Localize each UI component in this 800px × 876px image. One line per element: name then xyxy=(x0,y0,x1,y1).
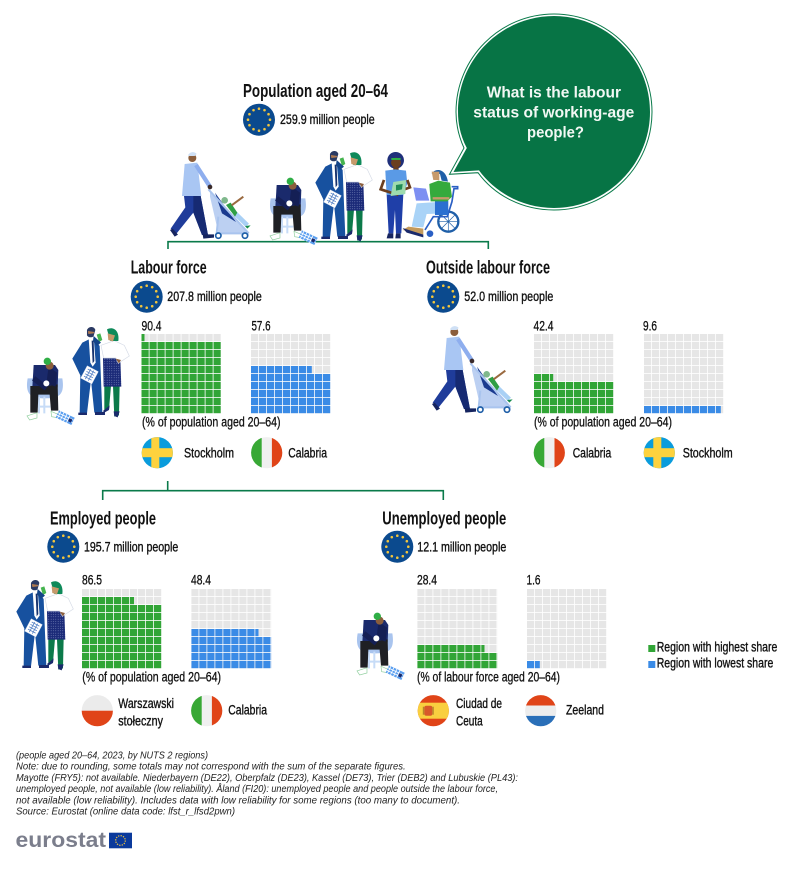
flag: Italy xyxy=(251,437,283,469)
icon: EU flag labour force xyxy=(131,281,163,313)
employed total: 195.7 million people xyxy=(84,540,178,555)
question text: What is the labour xyxy=(487,84,621,101)
heading: outside labour force: Outside labour force xyxy=(426,257,550,277)
heading: labour force: Labour force xyxy=(131,257,207,277)
panel: labour force xyxy=(27,257,331,469)
speech bubble callout xyxy=(450,14,652,210)
illustration: business couple xyxy=(72,327,129,417)
illustration: seated man xyxy=(27,358,75,425)
eurostat logo: eurostat xyxy=(16,829,106,852)
illustration: working-age people group xyxy=(170,151,458,245)
label: Warszawski stołeczny: Warszawski xyxy=(118,696,174,711)
question text: status of working-age xyxy=(473,104,634,121)
waffle chart: Ciudad de Ceuta 28.4 xyxy=(417,589,497,669)
waffle chart: Zeeland 1.6 xyxy=(527,589,607,669)
axis note: (% of population aged 20–64) xyxy=(534,415,672,430)
label: Ciudad de Ceuta xyxy=(456,696,502,729)
footnotes and source xyxy=(16,750,518,818)
waffle chart: Warszawski stołeczny 86.5 xyxy=(82,589,162,669)
waffle chart: Stockholm 90.4 xyxy=(142,334,222,414)
value: Calabria 42.4: 42.4 xyxy=(534,319,554,334)
icon: EU flag population xyxy=(243,104,275,136)
question text: people? xyxy=(527,125,584,142)
heading: employed people: Employed people xyxy=(50,508,156,528)
flag: Sweden xyxy=(643,437,675,469)
waffle chart: Calabria 42.4 xyxy=(534,334,614,414)
value: Stockholm 9.6: 9.6 xyxy=(643,319,657,334)
footnotes and source: not available (low reliability). Includes data with low reliability for some regions (too many to document). xyxy=(16,796,460,806)
value: Calabria 48.4: 48.4 xyxy=(191,572,211,587)
label: Ciudad de Ceuta: Ciudad de xyxy=(456,696,502,711)
label: Ciudad de Ceuta: Ceuta xyxy=(456,714,483,729)
waffle chart: Stockholm 9.6 xyxy=(644,334,724,414)
flag: Netherlands xyxy=(525,695,557,727)
value: Ciudad de Ceuta 28.4: 28.4 xyxy=(417,572,437,587)
heading: population aged 20-64: Population aged 20–64 xyxy=(243,81,388,101)
question text xyxy=(473,84,634,142)
illustration: seated man xyxy=(357,613,405,680)
footnotes and source: unemployed people, not available (low reliability). Åland (FI20): unemployed people and people outside the labour force, xyxy=(16,782,498,795)
flag: Italy xyxy=(533,437,566,469)
label: Zeeland: Zeeland xyxy=(566,702,604,717)
icon: EU flag employed xyxy=(47,531,79,563)
label: Stockholm: Stockholm xyxy=(184,445,234,460)
flag: Italy xyxy=(191,695,223,727)
label: Calabria: Calabria xyxy=(573,445,612,460)
label: Warszawski stołeczny xyxy=(118,696,174,729)
illustration: business couple xyxy=(16,580,73,670)
legend xyxy=(648,640,777,671)
connector: labour force to employed and unemployed xyxy=(103,481,443,500)
value: Warszawski stołeczny 86.5: 86.5 xyxy=(82,572,102,587)
panel: outside labour force xyxy=(426,257,733,469)
outside labour force total: 52.0 million people xyxy=(464,289,553,304)
label: Stockholm: Stockholm xyxy=(683,445,733,460)
footnotes and source: Source: Eurostat (online data code: lfst_r_lfsd2pwn) xyxy=(16,807,235,818)
axis note: (% of population aged 20–64) xyxy=(142,415,280,430)
flag: Sweden xyxy=(141,437,173,469)
value: Calabria 57.6: 57.6 xyxy=(252,319,270,334)
axis note: (% of labour force aged 20–64) xyxy=(417,670,560,685)
flag: Poland xyxy=(81,695,113,727)
flag: Spain xyxy=(417,695,449,727)
connector: population to labour force and outside labour force xyxy=(168,242,488,249)
waffle chart: Calabria 48.4 xyxy=(191,589,271,669)
axis note: (% of population aged 20–64) xyxy=(82,670,221,685)
panel: employed people xyxy=(16,508,271,729)
population total: 259.9 million people xyxy=(280,112,375,127)
unemployed total: 12.1 million people xyxy=(417,540,506,555)
footnotes and source: Note: due to rounding, some totals may not correspond with the sum of the separate figures. xyxy=(16,762,406,773)
heading: unemployed people: Unemployed people xyxy=(382,508,506,528)
label: Calabria: Calabria xyxy=(288,445,327,460)
label: Warszawski stołeczny: stołeczny xyxy=(118,714,163,729)
waffle chart: Calabria 57.6 xyxy=(251,334,331,414)
value: Zeeland 1.6: 1.6 xyxy=(526,572,540,587)
icon: EU flag outside labour force xyxy=(427,281,459,313)
labour force total: 207.8 million people xyxy=(167,289,262,304)
footnotes and source: Mayotte (FRY5): not available. Niederbayern (DE22), Oberpfalz (DE23), Kassel (DE73), Trier (DEB2) and Lubuskie (PL43): xyxy=(16,773,518,784)
footnotes and source: (people aged 20–64, 2023, by NUTS 2 regions) xyxy=(16,750,208,761)
icon: EU flag unemployed xyxy=(381,531,413,563)
label: Calabria: Calabria xyxy=(228,702,267,717)
value: Stockholm 90.4: 90.4 xyxy=(142,319,162,334)
illustration: woman with stroller xyxy=(432,326,513,413)
panel: unemployed people xyxy=(357,508,607,729)
